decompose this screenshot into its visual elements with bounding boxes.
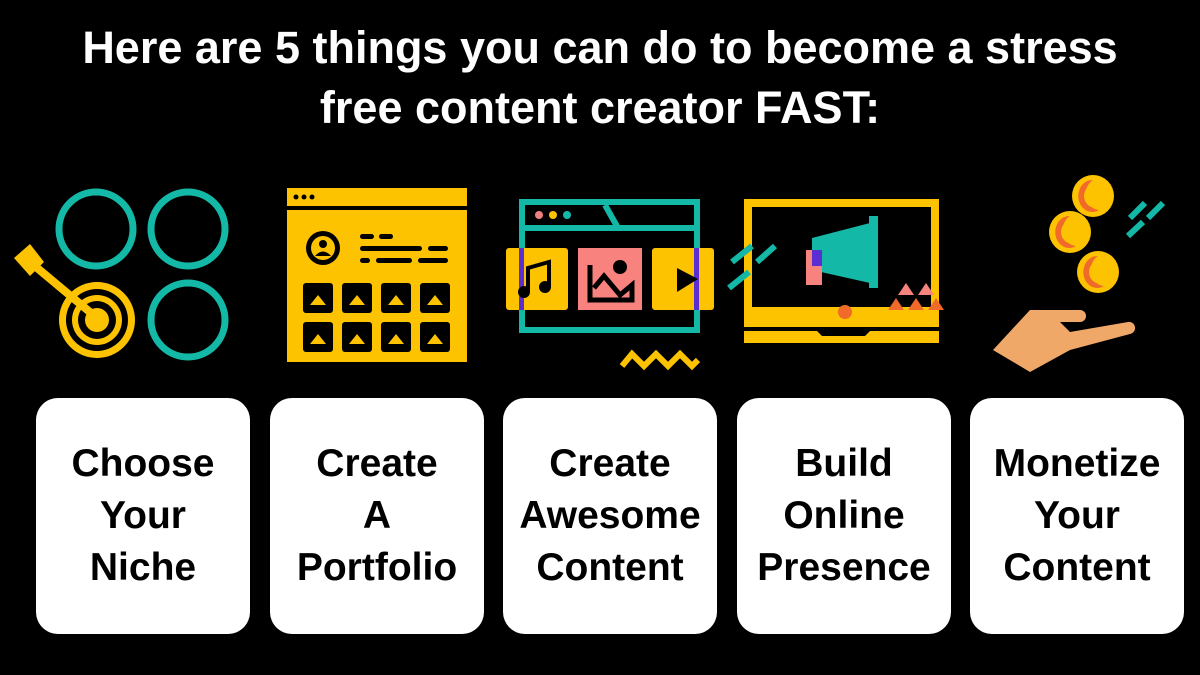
card: build online presence: Presence: [757, 546, 931, 589]
card: build online presence: Online: [783, 494, 905, 537]
title: Here are 5 things you can do to become a stress: [82, 22, 1118, 73]
card: choose your niche: [36, 398, 250, 634]
card: create a portfolio: [270, 398, 484, 634]
card: choose your niche: Choose: [71, 442, 214, 485]
card: monetize your content: Monetize: [994, 442, 1160, 485]
card: build online presence: [737, 398, 951, 634]
card: monetize your content: Content: [1003, 546, 1151, 589]
card: choose your niche: Your: [100, 494, 186, 537]
card: create awesome content: Create: [549, 442, 671, 485]
icon: portfolio: [287, 188, 467, 362]
card: create awesome content: [503, 398, 717, 634]
icon: target niche: [14, 192, 225, 358]
card: create a portfolio: A: [363, 494, 391, 537]
icon: online presence: [729, 203, 944, 343]
card: create a portfolio: Portfolio: [297, 546, 457, 589]
card: create a portfolio: Create: [316, 442, 438, 485]
card: choose your niche: Niche: [90, 546, 196, 589]
icon: awesome content: [506, 202, 714, 366]
title: [82, 22, 1118, 133]
card: monetize your content: [970, 398, 1184, 634]
icon: monetize: [993, 175, 1163, 372]
card: create awesome content: Awesome: [519, 494, 701, 537]
card: create awesome content: Content: [536, 546, 684, 589]
card: build online presence: Build: [795, 442, 893, 485]
title: free content creator FAST:: [320, 82, 880, 133]
card: monetize your content: Your: [1034, 494, 1120, 537]
icons: [14, 175, 1166, 372]
